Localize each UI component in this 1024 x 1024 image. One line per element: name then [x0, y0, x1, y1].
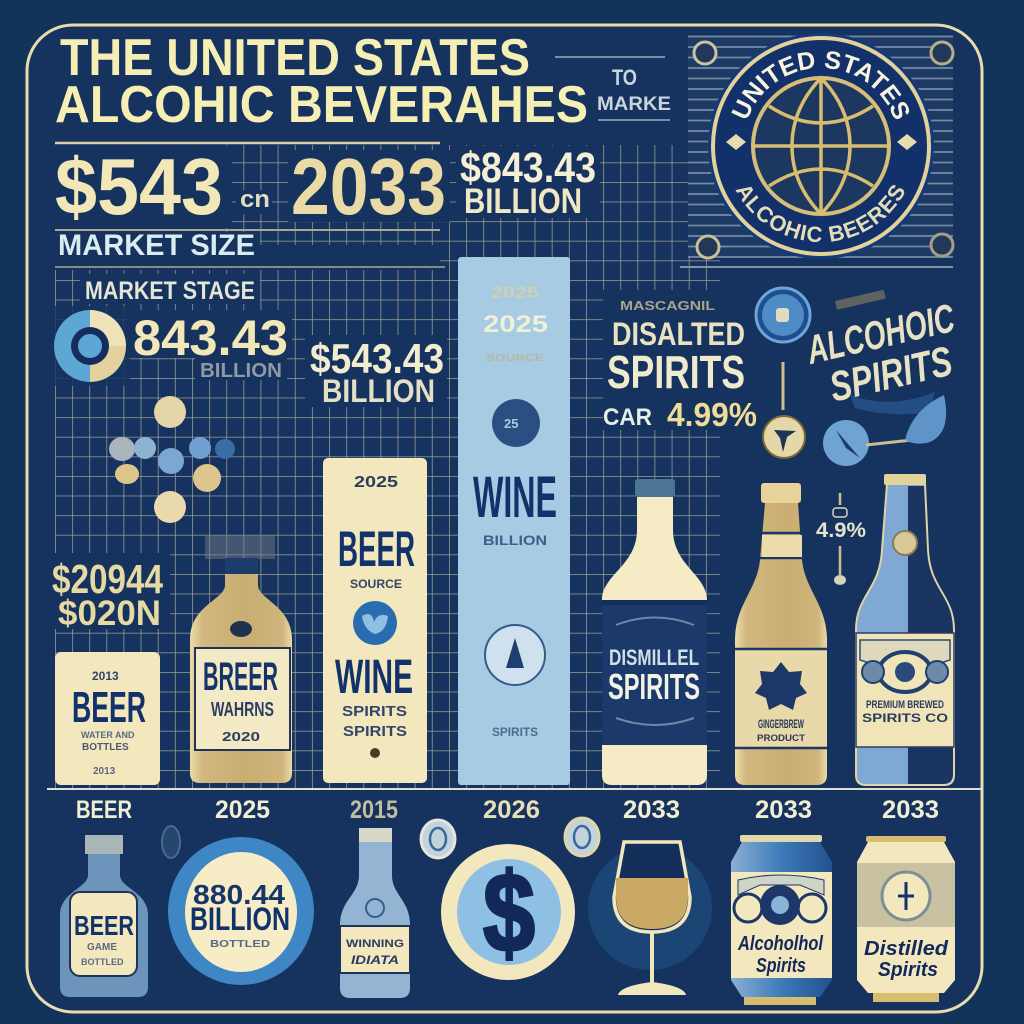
background grid	[55, 145, 720, 790]
bar: beer and wine 2025: 2025	[354, 474, 398, 491]
bar: wine 2025 tall: WINE	[473, 465, 557, 530]
bottom: dollar circle: $	[483, 850, 535, 975]
market stage block	[50, 274, 292, 386]
distilled spirits heading: 4.99%	[667, 396, 757, 433]
bar: beer and wine 2025	[323, 458, 427, 783]
bottom: can cream: Spirits	[878, 959, 938, 981]
small percent marker: 4.9%	[816, 519, 866, 542]
year labels row: 2033	[755, 796, 812, 824]
bottom: billion circle: BOTTLED	[210, 939, 270, 950]
bottom: blue bottle: WINNING	[346, 938, 404, 950]
alcoholic spirits heading	[797, 276, 969, 414]
title: THE UNITED STATES	[60, 29, 530, 87]
bottom: beer bottle: GAME	[87, 942, 117, 953]
bar: tan bottle: 2020	[222, 729, 260, 744]
decorative coin cluster	[109, 396, 235, 523]
distilled spirits heading: DISALTED	[612, 316, 745, 352]
bottle: blue label	[856, 474, 954, 785]
bottom: dollar circle	[441, 844, 575, 980]
year labels row: 2033	[623, 796, 680, 824]
market note: TO	[612, 65, 637, 90]
bottle: tan beer	[735, 483, 827, 785]
bar: wine 2025 tall: 25	[504, 416, 518, 431]
year labels row: 2033	[882, 796, 939, 824]
connector: line to cream badge	[782, 362, 784, 410]
year labels row: BEER	[76, 796, 132, 824]
market stage block: MARKET STAGE	[85, 277, 255, 305]
distilled spirits heading: MASCAGNIL	[620, 298, 715, 313]
year labels row	[76, 796, 939, 824]
small percent marker	[816, 493, 866, 585]
bar: wine 2025 tall	[458, 257, 570, 785]
market size headline	[40, 142, 600, 267]
year labels row: 2026	[483, 796, 540, 824]
bottom: can blue	[731, 835, 832, 1005]
title	[55, 29, 588, 134]
icon: donut chart	[54, 310, 126, 382]
bar: beer box	[55, 652, 160, 785]
year labels row: 2025	[215, 796, 270, 824]
bottle: blue label: SPIRITS CO	[862, 711, 948, 725]
distilled spirits heading: SPIRITS	[607, 346, 745, 398]
bar: wine 2025 tall: 2025	[483, 311, 548, 338]
value label 2094: $20944	[52, 556, 163, 602]
bottom: billion circle: BILLION	[190, 901, 290, 937]
year labels row: 2015	[350, 796, 398, 824]
market size headline: MARKET SIZE	[58, 229, 255, 262]
bar: wine 2025 tall: SPIRITS	[492, 725, 538, 739]
bar: beer box: 2013	[92, 669, 119, 683]
bottom: wine glass	[588, 842, 712, 995]
bottom: blue bottle	[340, 828, 410, 998]
bar: tan bottle: WAHRNS	[211, 699, 274, 721]
icon: blue badge and leaf	[823, 392, 946, 466]
bottom: can blue: Alcoholhol	[737, 933, 823, 955]
bar: beer box: WATER AND	[81, 730, 135, 740]
bottle: tan beer: PRODUCT	[757, 733, 806, 743]
distilled spirits heading	[603, 290, 760, 433]
emblem: united states alcoholic beverages seal	[680, 33, 954, 268]
market stage block: 843.43	[133, 310, 288, 366]
bar: tan bottle	[190, 535, 292, 783]
bar: wine 2025 tall: 2025	[491, 283, 539, 302]
bar: beer box: 2013	[93, 766, 116, 777]
market size headline: BILLION	[464, 182, 582, 221]
market note	[555, 57, 671, 120]
bottom: billion circle: 880.44	[193, 879, 285, 910]
value label 543.43 billion: BILLION	[322, 373, 435, 409]
market note: MARKE	[597, 94, 671, 115]
bottom: can blue: Spirits	[756, 955, 806, 977]
bottom: beer bottle: BEER	[74, 910, 134, 941]
bottom: beer bottle	[60, 835, 148, 997]
bottle: distilled spirits: DISMILLEL	[609, 645, 699, 670]
bar: wine 2025 tall: BILLION	[483, 532, 547, 548]
bar: beer and wine 2025: SPIRITS	[342, 703, 407, 720]
alcoholic spirits heading: ALCOHOIC	[802, 296, 959, 373]
baseline rule	[47, 788, 982, 790]
bar: wine 2025 tall: SOURCE	[486, 353, 544, 364]
bottom: beer bottle: BOTTLED	[81, 957, 124, 967]
value label 543.43 billion: $543.43	[310, 335, 444, 382]
market size headline: $543	[55, 142, 223, 231]
value label 2094: $020N	[58, 594, 161, 633]
bar: beer and wine 2025: SOURCE	[350, 577, 402, 591]
market size headline: 2033	[291, 142, 446, 231]
bottle: distilled spirits	[602, 479, 707, 785]
emblem: united states alcoholic beverages seal: ALCOHIC BEERES	[736, 185, 904, 242]
small coin	[421, 820, 455, 858]
market size headline: cn	[240, 186, 270, 213]
bar: beer and wine 2025: SPIRITS	[343, 723, 407, 740]
value label 543.43 billion	[305, 335, 447, 409]
bottom: can cream	[857, 836, 955, 1002]
bottle: blue label: PREMIUM BREWED	[866, 699, 944, 711]
bottom: blue bottle: IDIATA	[351, 953, 399, 967]
small coin	[565, 818, 599, 856]
bottom: can cream: Distilled	[864, 938, 949, 960]
icon: cream badge	[763, 416, 805, 458]
bottle: distilled spirits: SPIRITS	[608, 666, 700, 707]
bottom: billion circle	[168, 837, 314, 985]
title: ALCOHIC BEVERAHES	[55, 76, 588, 134]
value label 2094	[45, 553, 170, 633]
small coin	[162, 826, 180, 858]
bar: beer and wine 2025: WINE	[335, 651, 413, 704]
bottle: tan beer: GINGERBREW	[758, 717, 804, 731]
emblem: united states alcoholic beverages seal: UNITED STATES	[731, 51, 910, 119]
distilled spirits heading: CAR	[603, 404, 652, 431]
bar: beer box: BOTTLES	[82, 742, 129, 753]
alcoholic spirits heading: SPIRITS	[825, 337, 956, 411]
market size headline: $843.43	[460, 144, 596, 192]
bar: beer and wine 2025: BEER	[338, 521, 415, 577]
bar: tan bottle: BREER	[203, 655, 278, 699]
market stage block: BILLION	[200, 360, 282, 382]
icon: blue badge	[756, 288, 810, 342]
bar: beer box: BEER	[72, 683, 146, 732]
